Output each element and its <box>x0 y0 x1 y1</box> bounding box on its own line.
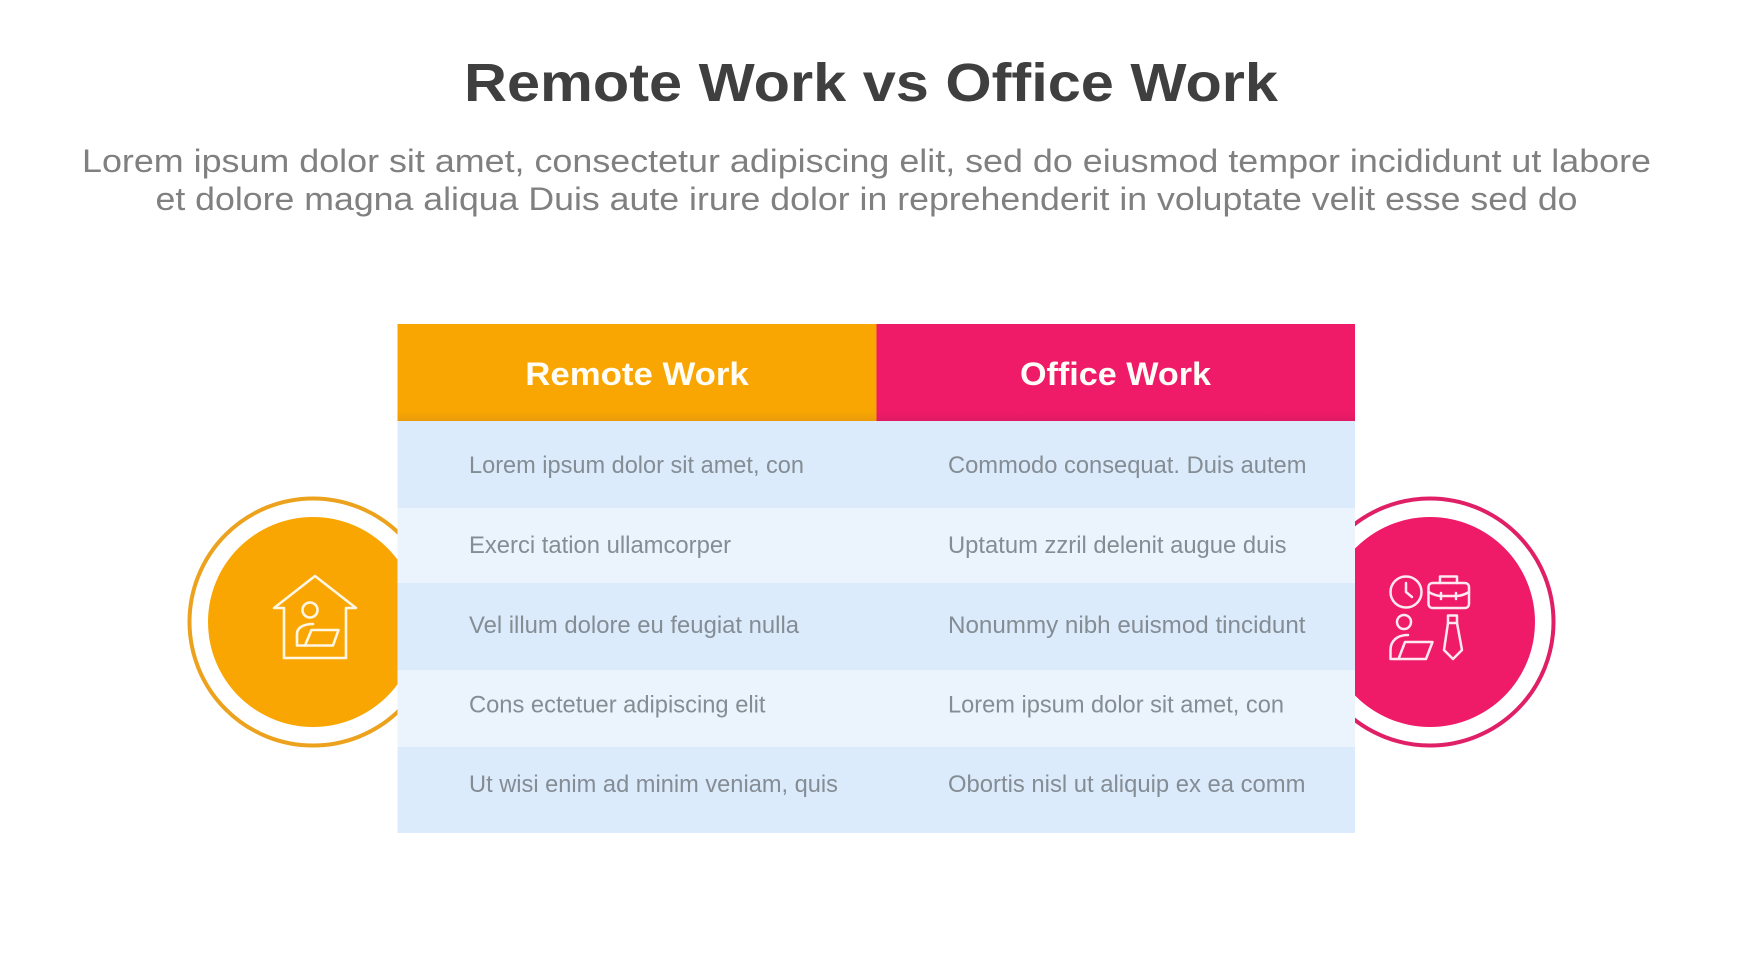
column: remote work items: Lorem ipsum dolor sit amet, con <box>469 452 804 479</box>
column: remote work items: Vel illum dolore eu feugiat nulla <box>469 612 800 639</box>
table <box>398 324 1355 833</box>
title: Remote Work vs Office Work <box>464 53 1279 113</box>
subtitle text <box>82 143 1651 217</box>
column: remote work items: Exerci tation ullamcorper <box>469 532 731 559</box>
header: remote work: Remote Work <box>525 356 749 392</box>
column: remote work items: Cons ectetuer adipiscing elit <box>469 692 766 718</box>
column: remote work items <box>469 452 838 798</box>
circle: remote work <box>190 498 436 746</box>
column: remote work items: Ut wisi enim ad minim veniam, quis <box>469 771 838 798</box>
subtitle text: et dolore magna aliqua Duis aute irure dolor in reprehenderit in voluptate velit esse sed do <box>156 181 1578 217</box>
column: office work items: Nonummy nibh euismod tincidunt <box>948 612 1306 639</box>
table rows background <box>398 421 1355 833</box>
circle: office work <box>1306 498 1554 746</box>
header: office work <box>876 324 1355 421</box>
column: office work items: Obortis nisl ut aliquip ex ea comm <box>948 771 1306 798</box>
header: remote work <box>398 324 876 421</box>
column: office work items <box>948 452 1306 798</box>
column: office work items: Commodo consequat. Duis autem <box>948 452 1306 479</box>
column: office work items: Uptatum zzril delenit augue duis <box>948 532 1286 559</box>
subtitle text: Lorem ipsum dolor sit amet, consectetur adipiscing elit, sed do eiusmod tempor incididunt ut labore <box>82 143 1651 179</box>
icon: clock, briefcase, person and tie <box>1390 576 1469 659</box>
column: office work items: Lorem ipsum dolor sit amet, con <box>948 692 1284 718</box>
icon: house with person and laptop <box>274 576 356 658</box>
header: office work: Office Work <box>1020 356 1211 392</box>
